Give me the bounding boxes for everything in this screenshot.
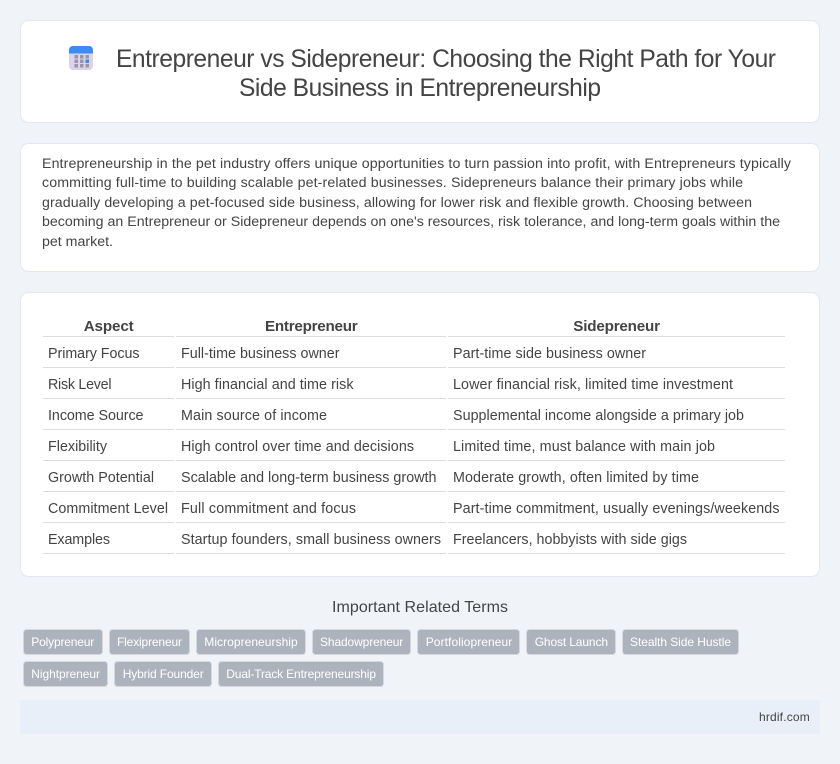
- row: examples: Examples: [48, 532, 110, 548]
- row: income source: Income Source: [48, 408, 144, 424]
- tag: Nightpreneur: Nightpreneur: [31, 667, 100, 681]
- description text: [42, 156, 792, 250]
- tag: Polypreneur: Polypreneur: [31, 635, 94, 649]
- tag: Hybrid Founder: [114, 662, 212, 686]
- header card: [20, 20, 820, 122]
- tag: Stealth Side Hustle: [622, 630, 738, 654]
- tag: Dual-Track Entrepreneurship: Dual-Track Entrepreneurship: [226, 667, 376, 681]
- row: risk level: [48, 377, 733, 393]
- tag: Micropreneurship: [196, 630, 306, 654]
- row: flexibility: [48, 439, 715, 455]
- row: growth potential: [48, 470, 699, 486]
- tag: Ghost Launch: Ghost Launch: [535, 635, 608, 649]
- tag: Hybrid Founder: Hybrid Founder: [123, 667, 204, 681]
- row: commitment level: Commitment Level: [48, 501, 168, 517]
- footer credit: hrdif.com: [759, 710, 810, 724]
- title: [116, 46, 776, 102]
- row: flexibility: Flexibility: [48, 439, 108, 455]
- tag: Ghost Launch: [526, 630, 616, 654]
- tag: Shadowpreneur: Shadowpreneur: [320, 635, 403, 649]
- row: examples: Startup founders, small business owners: [181, 532, 441, 548]
- description text: gradually developing a pet-focused side business, allowing for lower risk and flexible growth. Choosing between: [42, 195, 752, 211]
- comparison table: [43, 318, 785, 554]
- row: commitment level: [48, 501, 780, 517]
- table header: Sidepreneur: [573, 318, 660, 335]
- description text: becoming an Entrepreneur or Sidepreneur depends on one's resources, risk tolerance, and long-term goals within the: [42, 214, 780, 230]
- row: primary focus: Primary Focus: [48, 346, 140, 362]
- row: risk level: High financial and time risk: [181, 377, 354, 393]
- description card: [20, 144, 820, 272]
- row: primary focus: [48, 346, 646, 362]
- table header: Aspect: [84, 318, 134, 335]
- tag: Shadowpreneur: [312, 630, 410, 654]
- row: flexibility: Limited time, must balance with main job: [453, 439, 715, 455]
- table header: Entrepreneur: [265, 318, 358, 335]
- tag: Flexipreneur: [110, 630, 190, 654]
- related terms heading: Important Related Terms: [332, 599, 508, 616]
- row: growth potential: Growth Potential: [48, 470, 154, 486]
- related term tags: [24, 630, 738, 686]
- description text: Entrepreneurship in the pet industry offers unique opportunities to turn passion into profit, with Entrepreneurs typically: [42, 156, 792, 172]
- tag: Polypreneur: [24, 630, 102, 654]
- row: growth potential: Scalable and long-term business growth: [181, 470, 437, 486]
- table card: [20, 292, 820, 576]
- title: Side Business in Entrepreneurship: [239, 75, 601, 102]
- row: risk level: Lower financial risk, limited time investment: [453, 377, 733, 393]
- row: commitment level: Part-time commitment, usually evenings/weekends: [453, 501, 780, 517]
- row: commitment level: Full commitment and focus: [181, 501, 356, 517]
- row: flexibility: High control over time and decisions: [181, 439, 414, 455]
- tag: Flexipreneur: Flexipreneur: [117, 635, 182, 649]
- description text: committing full-time to building scalable pet-related businesses. Sidepreneurs balance their primary jobs while: [42, 175, 743, 191]
- icon: calendar: [69, 46, 93, 70]
- row: examples: Freelancers, hobbyists with side gigs: [453, 532, 687, 548]
- tag: Nightpreneur: [24, 662, 108, 686]
- row: primary focus: Part-time side business owner: [453, 346, 646, 362]
- title: Entrepreneur vs Sidepreneur: Choosing the Right Path for Your: [116, 46, 776, 73]
- row: income source: Main source of income: [181, 408, 327, 424]
- tag: Stealth Side Hustle: Stealth Side Hustle: [630, 635, 731, 649]
- row: risk level: Risk Level: [48, 377, 112, 393]
- row: growth potential: Moderate growth, often limited by time: [453, 470, 699, 486]
- row: examples: [48, 532, 687, 548]
- tag: Portfoliopreneur: Portfoliopreneur: [426, 635, 512, 649]
- row: income source: [48, 408, 744, 424]
- table header: [84, 318, 660, 335]
- tag: Dual-Track Entrepreneurship: [218, 662, 384, 686]
- row: primary focus: Full-time business owner: [181, 346, 340, 362]
- tag: Portfoliopreneur: [418, 630, 520, 654]
- footer bar: [20, 700, 820, 734]
- row: income source: Supplemental income alongside a primary job: [453, 408, 744, 424]
- description text: pet market.: [42, 234, 113, 250]
- tag: Micropreneurship: Micropreneurship: [204, 635, 298, 649]
